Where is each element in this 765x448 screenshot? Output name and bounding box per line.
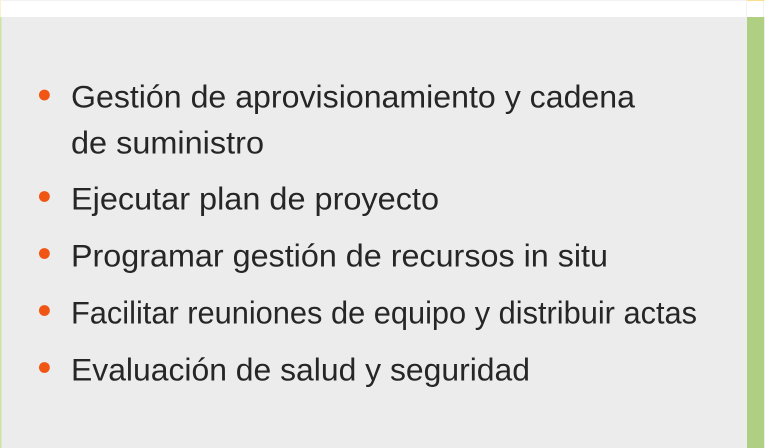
list item 5: Evaluación de salud y seguridad (71, 352, 530, 388)
left green edge (0, 17, 2, 448)
list item 4: Facilitar reuniones de equipo y distribuir actas (71, 294, 697, 330)
top white band (0, 0, 765, 17)
list item 1: de suministro (71, 124, 264, 160)
list item 2: Ejecutar plan de proyecto (71, 180, 439, 216)
right green bar (747, 17, 764, 448)
bullet list (39, 78, 697, 388)
list item 1 (39, 78, 635, 160)
list item 3: Programar gestión de recursos in situ (71, 238, 608, 274)
list item 1: Gestión de aprovisionamiento y cadena (71, 78, 635, 114)
